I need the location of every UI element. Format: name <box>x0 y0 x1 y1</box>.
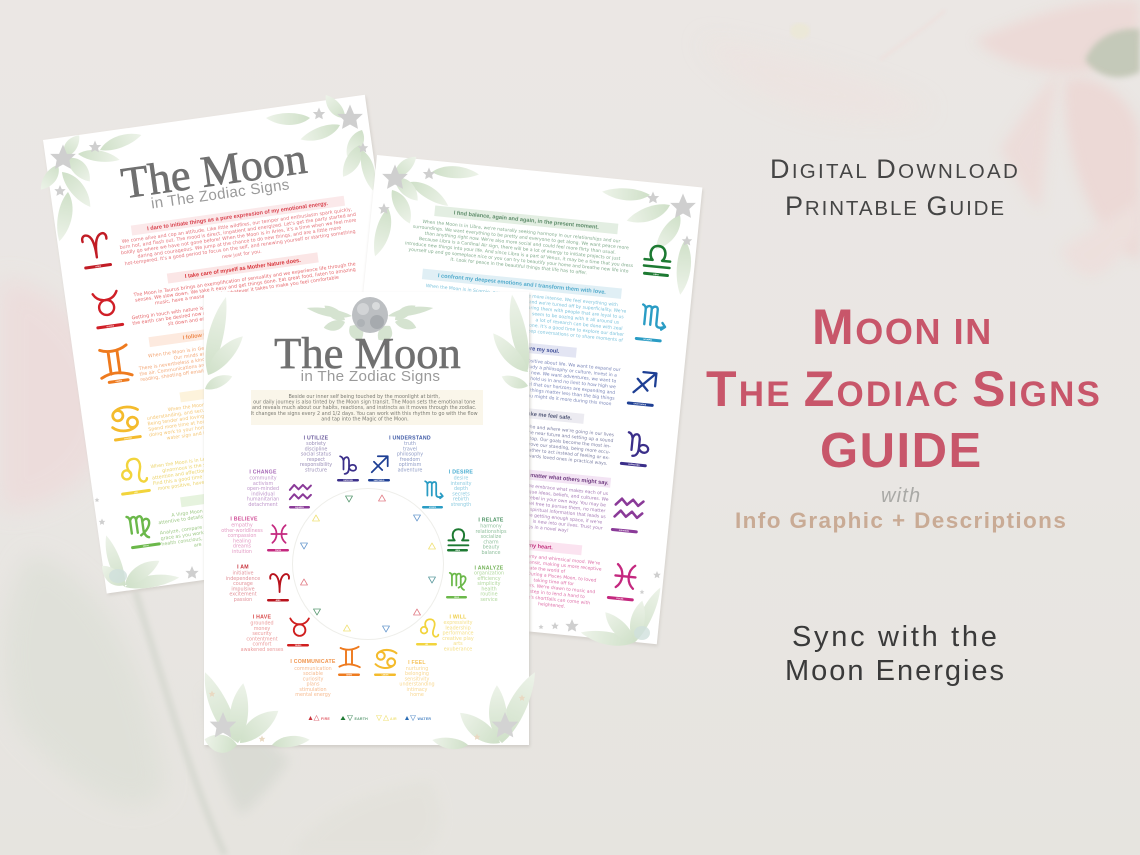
icon: Scorpio <box>635 304 667 343</box>
zodiac: Aries: excitement <box>229 592 257 598</box>
zodiac: Taurus: I HAVE <box>253 614 271 620</box>
zodiac: Leo: creative play <box>442 636 474 642</box>
section: Taurus description: sit down and enjoy it <box>167 315 218 327</box>
intro text box: and reveals much about our habits, reactions, and instincts as it moves through the zodiac. <box>252 405 477 411</box>
zodiac: Sagittarius: freedom <box>400 457 420 463</box>
section: Cancer description: water sign and it flows. <box>166 428 222 442</box>
zodiac: Aquarius: open-minded <box>247 486 279 492</box>
zodiac: Aries: I AM <box>237 564 249 570</box>
section: Sagittarius description: We feel positive about life. We want to expand our <box>507 356 621 373</box>
section: Sagittarius description: feel that our horizons are expanding and <box>523 381 616 396</box>
section: Aquarius description: be getting enough space, if we're <box>527 512 603 526</box>
section: Taurus description: I take care of myself as Mother Nature does. <box>185 258 302 280</box>
zodiac: Aquarius: humanitarian <box>247 497 279 503</box>
section: Cancer description: doing work to your home. Cancer is a <box>149 420 238 438</box>
section: Virgo description: I balance and bring order. <box>230 484 299 499</box>
icon: Cancer <box>110 405 142 442</box>
section: Libra description: than anything right now. We're also more social and could feel more flirty than usual. <box>424 231 616 256</box>
zodiac: Aquarius: I CHANGE <box>249 470 277 476</box>
zodiac: Sagittarius: optimism <box>399 462 422 468</box>
zodiac: Scorpio: rebirth <box>453 497 469 503</box>
section: Aquarius description: I am who I am, no matter what others might say. <box>482 468 609 487</box>
zodiac: Gemini: sociable <box>303 671 323 677</box>
section: Pisces description: taking time off for <box>533 577 574 587</box>
section: Aries description: We come alive and cop an attitude. Like little wildfires, our temper and enthusiasm spark quickly, <box>122 207 353 245</box>
zodiac: Virgo: routine <box>480 592 498 598</box>
zodiac: Scorpio: secrets <box>452 491 470 497</box>
zodiac: Aries: courage <box>233 581 253 587</box>
icon: Leo <box>116 457 151 496</box>
section: Libra description: it. Look for peace in the beautiful things that life has to offer. <box>450 257 587 276</box>
zodiac: Gemini: GEMINI <box>346 674 352 676</box>
page decoration: leaves and stars <box>196 293 542 755</box>
zodiac: Cancer: intimacy <box>407 687 428 693</box>
zodiac: Gemini <box>290 647 360 698</box>
section: Cancer description: When the Moon is in Cancer, we seek <box>167 395 257 413</box>
section: Capricorn description: at the top. Our goals become the most im- <box>515 434 611 450</box>
legend: elements: EARTH <box>354 717 368 721</box>
section: Scorpio description: depth and we're turned off by superficiality. We're <box>514 298 627 315</box>
section: Sagittarius description: you might do it more during this moon <box>524 393 612 407</box>
section: Libra description: introduce new things into your life. And since Libra is a part of Venus, it may be a time that you dress <box>405 240 634 269</box>
section: Aries description <box>117 194 361 274</box>
zodiac: Virgo: service <box>480 597 498 603</box>
zodiac: Gemini: plans <box>307 682 320 688</box>
section: Scorpio description: done. It's a good time to explore our darker <box>526 322 624 338</box>
section: Aries description: burn hot, and flash out. The mood is direct, impatient and energized. Let's get the party started and <box>119 212 356 251</box>
title: The Moon <box>274 328 461 378</box>
section: Aquarius description: We embrace what makes each of us <box>527 483 609 497</box>
section: Gemini description: I follow my curiosity wherever it leads. <box>182 321 285 341</box>
panel: left page, Aries to Virgo descriptions <box>0 45 449 639</box>
legend: elements: FIRE <box>321 717 330 721</box>
zodiac: Taurus: comfort <box>253 642 272 648</box>
intro text box: and tap into the Magic of the Moon. <box>321 416 409 422</box>
section: Pisces description: I let my dreams open my heart. <box>471 537 554 551</box>
section: Scorpio description <box>417 269 630 344</box>
section: Leo description: attention and affection are things we need. <box>152 461 255 481</box>
zodiac: Aquarius <box>247 470 311 509</box>
zodiac: Sagittarius: SAGITTARIUS <box>374 479 384 482</box>
section: Gemini description: When the Moon is in Gemini, we are curious <box>148 339 253 359</box>
zodiac: Libra <box>447 518 507 556</box>
zodiac: Gemini: curiosity <box>303 676 323 682</box>
zodiac: Scorpio: I DESIRE <box>449 470 473 476</box>
zodiac: Leo: LEO <box>425 644 429 646</box>
zodiac: Scorpio: strength <box>451 502 471 508</box>
section: Aries description: daring and courageous. We jump at the chance to do new things, and are a little more <box>137 225 342 260</box>
zodiac: Taurus: security <box>252 631 272 637</box>
zodiac: Libra: balance <box>481 550 501 556</box>
zodiac: Taurus: grounded <box>250 620 274 626</box>
section: Aquarius description: spiritual information that leads us <box>530 507 607 520</box>
zodiac: Gemini: communication <box>294 666 332 672</box>
zodiac: Capricorn: social status <box>301 452 332 458</box>
zodiac: Leo: I WILL <box>449 614 467 620</box>
zodiac: Aquarius: community <box>249 476 277 482</box>
heading: digital download printable guide: PRINTABLE GUIDE <box>785 191 1006 221</box>
section: Cancer description <box>144 369 354 444</box>
zodiac: Capricorn: discipline <box>305 446 327 452</box>
section: Taurus description: the earth can be desired now and it is <box>132 308 223 327</box>
zodiac: Pisces: compassion <box>228 533 256 539</box>
icon: Gemini: GEMINI <box>115 380 123 383</box>
zodiac: Virgo: health <box>481 586 497 592</box>
icon: Pisces: PISCES <box>616 598 624 601</box>
section: Capricorn description <box>398 396 617 467</box>
zodiac: Sagittarius: adventure <box>398 467 422 473</box>
icon: Libra: LIBRA <box>653 273 660 276</box>
zodiac: Pisces: other-worldliness <box>221 528 263 534</box>
icon: Leo: LEO <box>134 492 139 494</box>
icon: moon with leaf garland <box>306 297 434 345</box>
section: Aries description: hot-tempered. It's a good period to focus on the self, and renewing yourself or starting something <box>124 229 356 267</box>
left page title: The Moon <box>118 133 310 208</box>
section: Leo description: When the Moon is in Leo, we want to be <box>150 451 245 470</box>
zodiac: Sagittarius <box>368 436 431 482</box>
section: Capricorn description: I build things that make me feel safe. <box>474 406 573 422</box>
icon: Aries: ARIES <box>95 264 102 268</box>
section: Pisces description: and step in to lend a hand to <box>520 588 585 600</box>
legend: elements: AIR <box>390 717 397 721</box>
section: Virgo description: A Virgo Moon makes us practical and <box>171 501 259 519</box>
zodiac: Libra: relationships <box>476 529 507 535</box>
zodiac: Aries: independence <box>226 576 260 582</box>
heading: digital download printable guide: DIGITAL DOWNLOAD <box>770 154 1020 184</box>
zodiac: Virgo: simplicity <box>477 581 501 587</box>
section: Virgo description: grace as you work on your goals. <box>160 525 239 542</box>
zodiac: Capricorn: responsibility <box>300 462 332 468</box>
section: Libra description: yourself up and go someplace nice or you can try to beautify your home and breathe new life into <box>408 247 629 275</box>
panel: right page, Libra to Pisces descriptions <box>320 120 745 682</box>
section: Virgo description: attentive to details in every way. <box>158 509 236 526</box>
zodiac: Leo: expressivity <box>443 620 473 626</box>
zodiac: Cancer: CANCER <box>382 673 389 676</box>
left page zodiac icons <box>80 232 161 550</box>
section: Taurus description <box>126 247 362 332</box>
zodiac: Capricorn: sobriety <box>306 441 326 447</box>
section: Gemini description: There is nevertheless a kind of lightness in the air <box>137 350 257 372</box>
section: Taurus description: The Moon in Taurus brings an exemplification of sensuality and we experience life through the <box>132 261 356 299</box>
zodiac: Cancer: belonging <box>405 671 429 677</box>
icon: Scorpio: SCORPIO <box>643 339 653 342</box>
zodiac: Taurus: contentment <box>246 636 278 642</box>
icon: Pisces <box>607 563 637 602</box>
zodiac: Libra: harmony <box>480 524 502 530</box>
zodiac: Aquarius: AQUARIUS <box>295 506 304 509</box>
left page title: in The Zodiac Signs <box>150 176 291 212</box>
zodiac: Leo: leadership <box>445 625 471 631</box>
subtitle: with info graphic and descriptions: Info Graphic + Descriptions <box>735 508 1067 533</box>
zodiac: Virgo: I ANALYZE <box>475 566 504 572</box>
section: Capricorn description: in the near future and setting up a sound <box>521 429 614 444</box>
subtitle: with info graphic and descriptions <box>735 485 1067 533</box>
section: Pisces description: We enter a dreamy and whimsical mood. We're <box>494 550 601 567</box>
zodiac: Sagittarius: philosophy <box>397 452 423 458</box>
title: in The Zodiac Signs <box>301 368 440 385</box>
zodiac: Cancer: sensitivity <box>405 676 429 682</box>
zodiac: Libra: charm <box>483 539 499 545</box>
icon: Sagittarius: SAGITTARIUS <box>633 402 647 406</box>
section: Scorpio description: seem to be oozing with it all around us <box>532 311 620 326</box>
section: Pisces description: heightened. <box>538 601 565 610</box>
section: Gemini description: reading, shooting off emails and more. <box>140 364 232 383</box>
icon: Taurus: TAURUS <box>106 324 115 328</box>
zodiac: Virgo: efficiency <box>477 576 501 582</box>
section: Aquarius description: is new into our lives. Trust your <box>532 519 603 532</box>
zodiac: Capricorn: structure <box>305 467 327 473</box>
zodiac: Taurus <box>241 614 309 653</box>
zodiac: Cancer: I FEEL <box>408 660 426 666</box>
section: Aquarius description <box>381 455 612 538</box>
section: Virgo description: health conscious, and we <box>161 533 222 548</box>
section: Scorpio description: sharing them with people that are loyal to us <box>522 304 625 320</box>
zodiac: Capricorn <box>300 436 359 482</box>
icon: Aquarius <box>611 498 643 534</box>
section: Cancer description: Being tender and loving comes easily to us. <box>147 407 251 427</box>
zodiac: Taurus: TAURUS <box>295 644 301 647</box>
section: Capricorn description: We think about who and where we're going in our lives <box>490 420 615 438</box>
main title: Moon in The Zodiac Signs Guide: THE ZODIAC SIGNS <box>706 361 1102 417</box>
section: Libra description: I find balance, again and again, in the present moment. <box>453 210 599 231</box>
subtitle: with info graphic and descriptions: with <box>881 485 921 507</box>
legend: elements <box>308 716 431 721</box>
section: Taurus description: music, have a massage, or do whatever it takes to make you feel comfortable <box>155 275 339 306</box>
section: Sagittarius description: little things matter less than the big things <box>518 386 615 402</box>
section: Aquarius description: feel free to pursue them, no matter <box>525 500 606 514</box>
section: Capricorn description: improve our standing, being more accu- <box>520 441 611 456</box>
icon: Gemini <box>98 345 133 385</box>
intro text box: Beside our inner self being touched by the moonlight at birth, <box>288 394 440 400</box>
icon: Capricorn <box>620 432 650 468</box>
section: Gemini description <box>134 314 323 383</box>
zodiac: Virgo: organization <box>474 570 504 576</box>
zodiac: Virgo: VIRGO <box>454 597 460 599</box>
zodiac: Libra: I RELATE <box>478 518 504 524</box>
intro text box: our daily journey is also tinted by the Moon sign transit. The Moon sets the emotional tone <box>253 400 475 406</box>
section: Aquarius description: things in a novel way! <box>519 523 569 534</box>
section: Sagittarius description: study a philosophy or culture, invest in a <box>525 364 617 379</box>
icon: Aquarius: AQUARIUS <box>619 529 630 533</box>
zodiac: Pisces: intuition <box>232 549 252 555</box>
section: Virgo description: Analyze, compare and sort with <box>159 520 235 537</box>
section: Scorpio description: deep conversations or to share moments of <box>525 328 623 344</box>
zodiac: Scorpio: desire <box>454 476 468 482</box>
icon: Virgo <box>127 513 161 550</box>
tagline: sync with the moon energies: Moon Energies <box>785 655 1006 687</box>
tagline: sync with the moon energies: Sync with the <box>792 621 1000 653</box>
heading: digital download printable guide <box>770 154 1020 221</box>
section: Aquarius description: rebel in your own way. You may be <box>528 495 606 509</box>
section: Gemini description: the air. Communications are quick and lively, and <box>139 355 257 378</box>
section: Aries description: boldly go where we have not gone before! When the Moon is in Aries, it's a time when we feel more <box>121 217 357 256</box>
section: Scorpio description: When the Moon is in Scorpio, our emotions are more intense. We feel everything with <box>426 283 618 308</box>
section: Sagittarius description: I open my mind and explore my soul. <box>461 339 560 355</box>
zodiac: Aries: ARIES <box>276 599 280 602</box>
icon: Sagittarius <box>627 371 657 407</box>
section: Aquarius description: unique ideas, beliefs, and cultures. We <box>521 488 609 503</box>
page decoration: leaves and stars <box>369 152 696 649</box>
zodiac: Pisces: healing <box>233 538 251 544</box>
zodiac: Cancer <box>374 650 435 698</box>
element triangles around the wheel <box>300 495 436 632</box>
section: Aries description: new just for you. <box>222 249 262 260</box>
zodiac: Virgo <box>446 566 504 603</box>
main title: Moon in The Zodiac Signs Guide <box>706 299 1102 478</box>
icon: Capricorn: CAPRICORN <box>628 463 640 467</box>
section: Cancer description: understanding, and security from those we love. <box>146 400 262 422</box>
section: Sagittarius description: right now. We want adventures, we want to <box>519 369 617 384</box>
zodiac: Aquarius: detachment <box>248 502 278 508</box>
zodiac: Sagittarius: truth <box>404 441 416 447</box>
section: Leo description <box>148 420 361 493</box>
panel: centre page, zodiac wheel infographic <box>196 292 542 755</box>
tagline: sync with the moon energies <box>785 621 1006 687</box>
zodiac: Leo: exuberance <box>444 646 472 652</box>
section: Cancer description: I nurture and protect. <box>236 380 293 393</box>
section: Taurus description: Getting in touch with nature is a good idea. <box>131 301 234 321</box>
zodiac: Aries: initiative <box>232 570 254 576</box>
section: Libra description: Because Libra is a Cardinal Air sign, there will be a lot of energy to initiate projects or just <box>419 236 621 262</box>
zodiac: Capricorn: CAPRICORN <box>343 479 354 482</box>
zodiac: Capricorn: respect <box>307 457 325 463</box>
zodiac: Cancer: home <box>410 692 424 698</box>
zodiac: Cancer: understanding <box>399 682 435 688</box>
main title: Moon in The Zodiac Signs Guide: MOON IN <box>812 299 993 355</box>
zodiac: Pisces: I BELIEVE <box>230 516 258 522</box>
icon: Taurus <box>92 291 124 330</box>
right page zodiac icons <box>607 245 672 602</box>
zodiac: Gemini: mental energy <box>295 692 331 698</box>
section: Gemini description: Our minds are active and restless. <box>173 344 255 362</box>
zodiac: Aries: impulsive <box>231 586 255 592</box>
section: Leo description: I shine my light. <box>260 431 303 443</box>
zodiac: Sagittarius: I UNDERSTAND <box>389 436 431 442</box>
section: Scorpio description: I confront my deepest emotions and I transform them with love. <box>438 273 607 296</box>
zodiac: Pisces: dreams <box>233 544 252 550</box>
zodiac: Aries <box>226 564 289 603</box>
chart: zodiac wheel ring <box>292 488 444 640</box>
zodiac: Aquarius: activism <box>253 481 273 487</box>
section: Libra description: When the Moon is in Libra, we're naturally seeking harmony in our relationships and our <box>422 219 621 245</box>
icon: Cancer: CANCER <box>124 436 133 441</box>
section: Leo description: ginormous is the sense of self-confidence <box>162 455 260 474</box>
section: Leo description: more positive, have some fun. <box>157 476 230 492</box>
section: Aries description: I dare to initiate things as a pure expression of my emotional energy. <box>147 201 329 232</box>
zodiac: Scorpio: intensity <box>450 481 472 487</box>
section: Virgo description: are <box>194 542 202 549</box>
section: Virgo description <box>155 474 356 553</box>
section: Pisces description: transit, making us more receptive <box>525 559 602 573</box>
zodiac: Sagittarius: travel <box>403 446 417 452</box>
zodiac: Scorpio <box>422 470 473 509</box>
zodiac: Leo: arts <box>453 641 463 647</box>
section: Libra description: surroundings. We want everything to be pretty and everyone to get along. We want peace more <box>413 224 629 251</box>
main title: Moon in The Zodiac Signs Guide: GUIDE <box>820 424 983 478</box>
zodiac: Cancer: nurturing <box>406 666 428 672</box>
section: Pisces description: navigate the world of <box>517 564 566 575</box>
zodiac: Pisces: PISCES <box>275 550 281 552</box>
section: Pisces description <box>374 525 605 613</box>
zodiac: Libra: beauty <box>483 545 500 551</box>
icon: Virgo: VIRGO <box>143 545 150 548</box>
zodiac: Pisces <box>221 516 289 555</box>
intro text box: It changes the signs every 2 and 1/2 days. You can work with this rhythm to go with the flow <box>251 411 478 417</box>
section: Taurus description: senses. We slow down. We take it easy and get things done. Eat great food, listen to amazing <box>135 267 356 304</box>
zodiac: Pisces: empathy <box>231 522 253 528</box>
legend: elements: WATER <box>418 717 431 721</box>
zodiac: Scorpio: SCORPIO <box>429 507 437 509</box>
zodiac: Leo: performance <box>442 631 474 637</box>
section: Libra description <box>404 203 639 281</box>
section: Leo description: Find this a good time to play, create <box>153 469 238 487</box>
zodiac: Aquarius: individual <box>251 491 275 497</box>
zodiac: Gemini: stimulation <box>299 687 327 693</box>
section: Capricorn description: towards loved ones in practical ways. <box>523 453 608 467</box>
section: Pisces description: people's shortfalls can come with <box>515 593 591 606</box>
zodiac: Libra: LIBRA <box>455 549 461 552</box>
section: Capricorn description: rather to act instead of feeling or ex- <box>526 447 610 461</box>
section: Scorpio description: a lot of research can be done with zeal <box>535 317 623 332</box>
zodiac: Taurus: money <box>254 626 270 632</box>
zodiac: Scorpio: depth <box>454 486 468 492</box>
zodiac: Libra: socialize <box>481 534 501 540</box>
intro text box <box>251 390 483 425</box>
section: Pisces description: During a Pisces Moon, to loved <box>527 571 597 584</box>
zodiac: Leo <box>416 614 474 652</box>
zodiac: Capricorn: I UTILIZE <box>304 436 329 442</box>
zodiac: Gemini: I COMMUNICATE <box>290 659 336 665</box>
section: Sagittarius description <box>409 332 624 408</box>
zodiac: Taurus: awakened senses <box>241 647 284 653</box>
icon: Libra <box>643 245 672 277</box>
section: Pisces description: others. We're drawn to music and <box>519 582 596 595</box>
zodiac: Aries: passion <box>234 597 252 603</box>
icon: Aries <box>80 232 112 270</box>
section: Cancer description: Spend more time at home with your family <box>148 413 250 433</box>
section: Sagittarius description: can hold us in and no limit to how high we <box>520 375 616 390</box>
page decoration: leaves and stars <box>37 92 380 592</box>
